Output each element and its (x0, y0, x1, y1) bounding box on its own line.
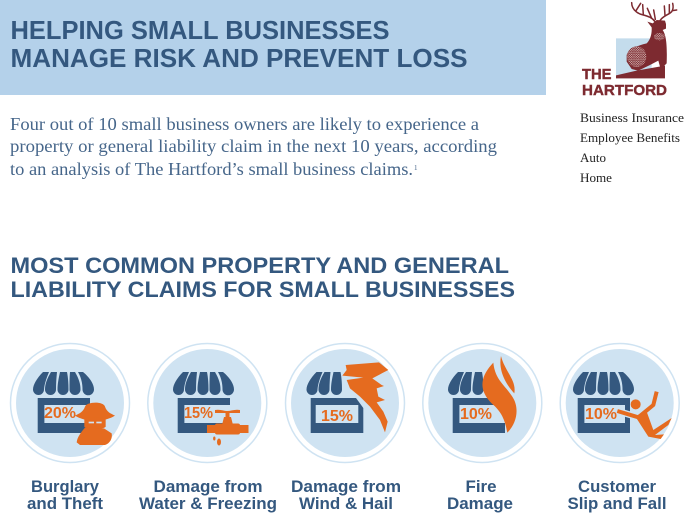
icon: tornado (342, 362, 388, 432)
claim: burglary and theft: 20% (44, 405, 76, 422)
claim: fire damage (423, 344, 542, 513)
section heading: LIABILITY CLAIMS FOR SMALL BUSINESSES (10, 277, 515, 302)
section heading (10, 253, 515, 302)
navigation list: Auto (580, 151, 606, 165)
claim: customer slip and fall: 10% (585, 406, 617, 423)
header band (0, 0, 546, 95)
claim: burglary and theft: and Theft (27, 495, 104, 513)
claim: damage from water and freezing (139, 344, 277, 513)
claim: fire damage: Fire (466, 478, 496, 496)
claim: damage from wind and hail: 15% (321, 408, 353, 425)
title: HELPING SMALL BUSINESSES (10, 15, 390, 45)
title: MANAGE RISK AND PREVENT LOSS (10, 43, 468, 73)
icon: leaking faucet (207, 410, 248, 446)
navigation list (580, 111, 684, 185)
navigation list: Employee Benefits (580, 131, 680, 145)
stag figure (616, 3, 677, 78)
navigation list: Business Insurance (580, 111, 684, 125)
title (10, 15, 468, 73)
claim: fire damage: 10% (460, 406, 492, 423)
logo wordmark: THE (582, 66, 612, 83)
logo wordmark (582, 66, 667, 99)
claim: damage from wind and hail (286, 344, 404, 513)
logo wordmark: HARTFORD (582, 82, 667, 99)
navigation list: Home (580, 171, 612, 185)
claim: damage from water and freezing: Water & Freezing (139, 495, 277, 513)
logo sky square (616, 38, 652, 78)
claim: customer slip and fall (560, 344, 679, 513)
claim: damage from wind and hail: Damage from (291, 478, 401, 496)
intro text: Four out of 10 small business owners are likely to experience a (10, 114, 479, 134)
claim: customer slip and fall: Slip and Fall (568, 495, 666, 513)
claim: damage from water and freezing: Damage from (154, 478, 262, 496)
claim: burglary and theft (10, 344, 130, 513)
section heading: MOST COMMON PROPERTY AND GENERAL (10, 253, 509, 278)
icon: falling person (617, 392, 672, 439)
claim: fire damage: Damage (447, 495, 513, 513)
claim: damage from wind and hail: Wind & Hail (299, 495, 393, 513)
intro text (10, 114, 497, 179)
icon: flame (482, 356, 517, 433)
intro text: to an analysis of The Hartford’s small business claims. (10, 159, 413, 179)
claim: burglary and theft: Burglary (31, 478, 100, 496)
intro text: 1 (414, 164, 418, 172)
logo: The Hartford stag (616, 3, 677, 78)
icon: burglar (75, 403, 115, 445)
claim: damage from water and freezing: 15% (184, 405, 213, 422)
claim: customer slip and fall: Customer (578, 478, 657, 496)
intro text: property or general liability claim in the next 10 years, according (10, 136, 497, 156)
